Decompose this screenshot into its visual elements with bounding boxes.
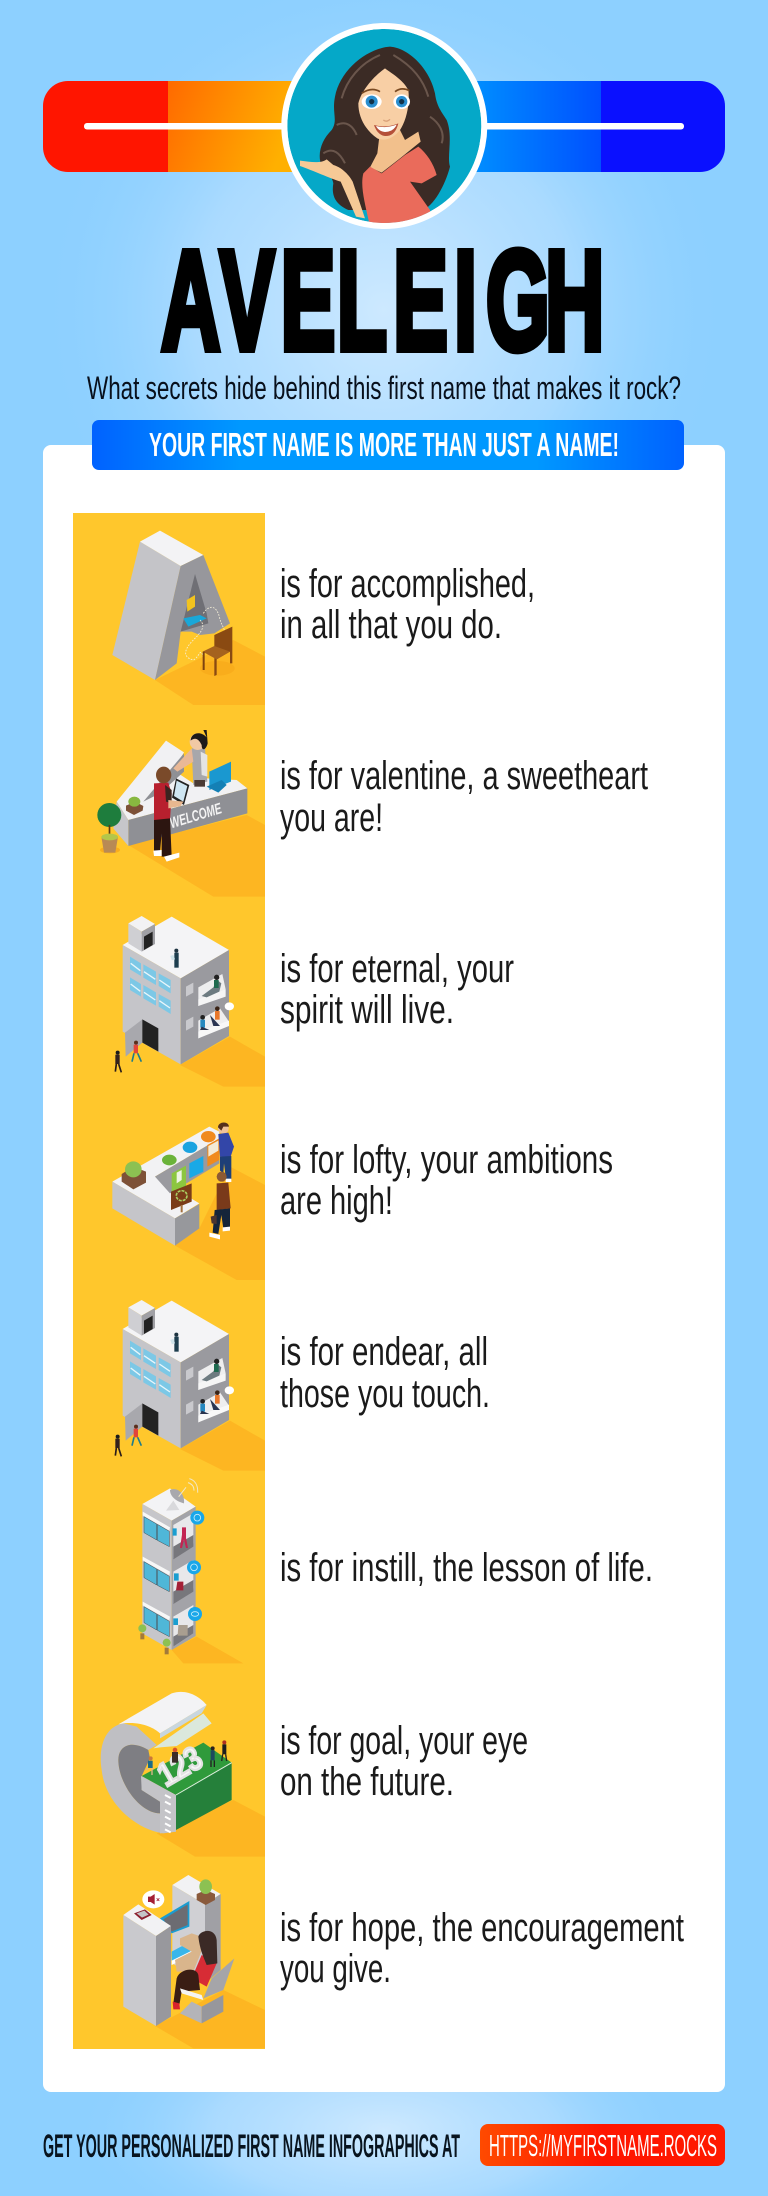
row text: E: is for eternal, your: [280, 947, 514, 991]
header banner: [43, 81, 725, 172]
row text: E: [280, 947, 514, 1032]
row text: E second: [280, 1330, 490, 1416]
row text: E second: those you touch.: [280, 1372, 490, 1416]
icon: tall tower I: [138, 1479, 243, 1663]
row text: A: is for accomplished,: [280, 562, 535, 606]
main white panel: [43, 445, 725, 2092]
icon: welcome reception desk: [97, 730, 265, 897]
row text: V: you are!: [280, 796, 383, 840]
icon: welcome reception desk: WELCOME: [168, 800, 224, 832]
row text: V: [280, 754, 648, 840]
yellow illustration column: [73, 513, 265, 2049]
row text: A: [280, 562, 535, 647]
icon: letter H with woman at computer: [123, 1875, 265, 2048]
icon: office building E: [115, 916, 265, 1087]
icon: letter G with green roof: 123: [151, 1740, 209, 1794]
avatar: woman in circle: [281, 23, 487, 229]
icon: office building E second: [115, 1300, 265, 1471]
row text: G: is for goal, your eye: [280, 1719, 528, 1763]
row text: G: on the future.: [280, 1760, 454, 1804]
row text: G: [280, 1719, 528, 1804]
row text: E: spirit will live.: [280, 988, 454, 1032]
row text: L: are high!: [280, 1179, 393, 1223]
icon: recycling desk L: [112, 1122, 265, 1280]
row text: L: [280, 1138, 613, 1223]
icon: letter A with desk and chair: [112, 531, 265, 705]
tagline pill: [92, 420, 684, 470]
title: AVELEIGH: [161, 223, 604, 380]
row text: H: [280, 1906, 684, 1991]
row text: E second: is for endear, all: [280, 1330, 488, 1374]
row text: A: in all that you do.: [280, 603, 502, 647]
row text: L: is for lofty, your ambitions: [280, 1138, 613, 1182]
icon: letter G with green roof: [101, 1692, 265, 1857]
row text: H: you give.: [280, 1947, 391, 1991]
